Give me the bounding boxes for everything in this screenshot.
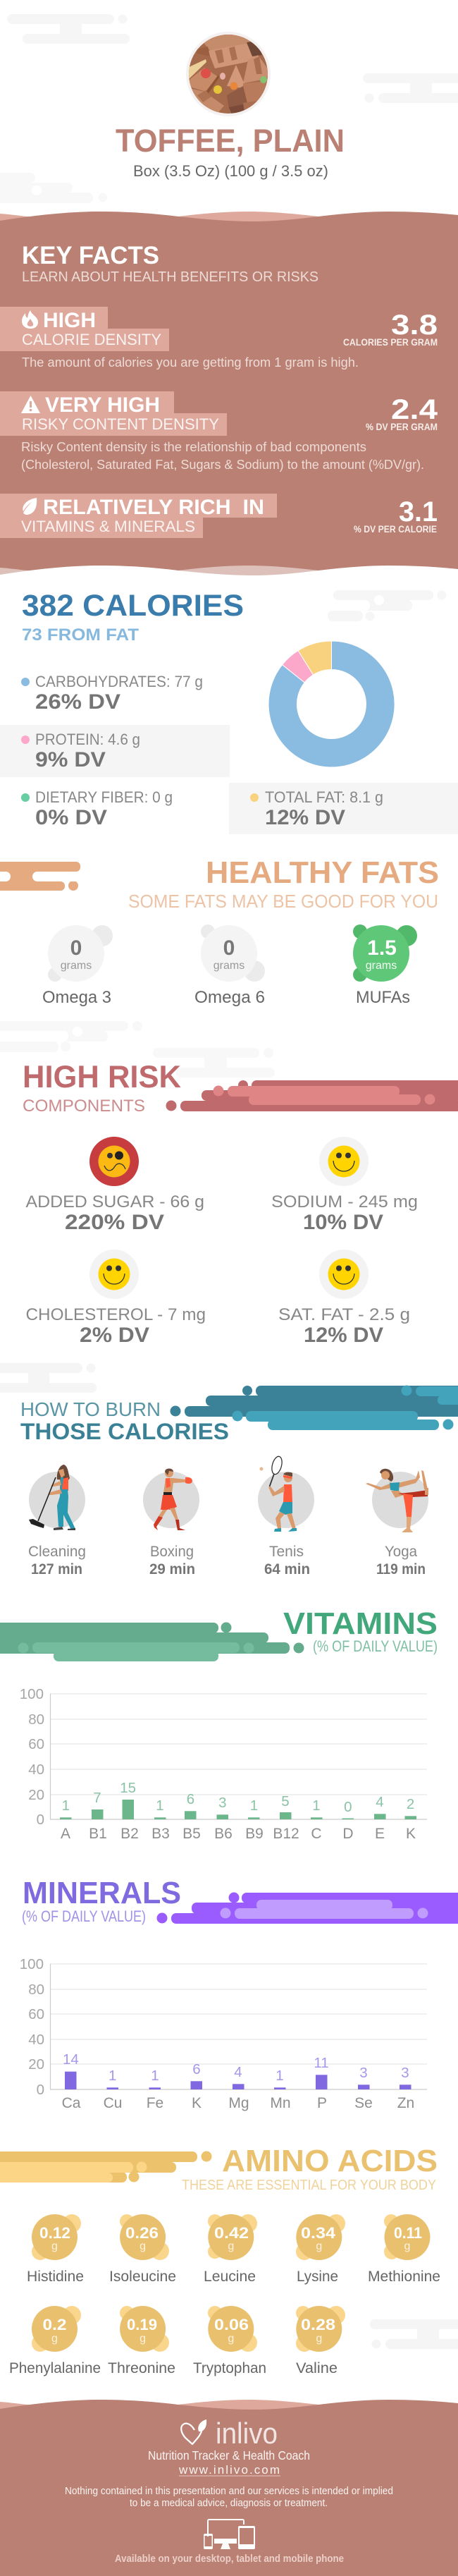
label calorie density: CALORIE DENSITY bbox=[22, 331, 161, 348]
panel: key facts bbox=[0, 212, 458, 594]
component: sodium: 10% DV bbox=[303, 1211, 383, 1234]
icon: devices bbox=[204, 2519, 255, 2549]
x axis labels: A bbox=[61, 1826, 70, 1842]
key facts heading: KEY FACTS bbox=[22, 242, 159, 269]
value labels: 14 bbox=[63, 2051, 79, 2068]
top wave bbox=[0, 212, 458, 585]
x axis labels: B1 bbox=[89, 1826, 107, 1842]
legend: protein: PROTEIN: 4.6 g bbox=[35, 731, 140, 748]
label vitamins and minerals: VITAMINS & MINERALS bbox=[21, 518, 195, 535]
activity: yoga bbox=[366, 1469, 428, 1577]
fat: omega 3: grams bbox=[61, 960, 92, 972]
y axis labels bbox=[20, 1686, 44, 1828]
decorative cloud bbox=[328, 590, 447, 621]
amino: tryptophan bbox=[193, 2306, 266, 2376]
fact: risky content density bbox=[0, 391, 438, 472]
value labels: 1 bbox=[156, 1797, 164, 1814]
y axis labels: 20 bbox=[28, 2056, 44, 2073]
website link: www.inlivo.com bbox=[178, 2463, 280, 2477]
y axis labels: 80 bbox=[28, 1711, 44, 1728]
amino: threonine: 0.19 bbox=[127, 2316, 157, 2333]
panel: vitamins bbox=[0, 1606, 438, 1842]
y axis labels: 80 bbox=[28, 1982, 44, 1998]
x axis labels: B12 bbox=[273, 1826, 299, 1842]
component: saturated fat bbox=[278, 1250, 410, 1347]
activity: yoga: Yoga bbox=[385, 1544, 417, 1560]
fat: omega 6: grams bbox=[213, 960, 245, 972]
amino: threonine: Threonine bbox=[108, 2360, 175, 2376]
amino: lysine: 0.34 bbox=[301, 2224, 336, 2242]
x axis labels: Ca bbox=[62, 2095, 81, 2111]
figure: tennis player bbox=[259, 1455, 297, 1532]
decorative clouds middle bbox=[0, 1021, 275, 1078]
y axis labels: 40 bbox=[28, 1762, 44, 1778]
panel: minerals bbox=[20, 1876, 458, 2111]
amino: methionine bbox=[368, 2214, 440, 2285]
component: sodium bbox=[271, 1137, 418, 1234]
value labels: 2 bbox=[407, 1796, 414, 1812]
activity: cleaning bbox=[28, 1465, 86, 1577]
calories heading: 382 CALORIES bbox=[22, 589, 244, 623]
component: added sugar: 220% DV bbox=[65, 1211, 164, 1234]
fat: mufas: MUFAs bbox=[356, 988, 410, 1007]
x axis labels: Fe bbox=[147, 2095, 163, 2111]
disclaimer: Nothing contained in this presentation and our services is intended or implied bbox=[65, 2486, 393, 2497]
icon: heart with leaf bbox=[181, 2419, 206, 2444]
decorative cloud top left bbox=[7, 14, 130, 44]
legend: carbohydrates bbox=[21, 673, 203, 714]
figure: boxer bbox=[154, 1468, 192, 1530]
amino: leucine: Leucine bbox=[204, 2269, 256, 2285]
value labels: 1 bbox=[62, 1797, 70, 1814]
component: cholesterol: CHOLESTEROL - 7 mg bbox=[25, 1305, 206, 1324]
disclaimer bbox=[65, 2486, 393, 2509]
figure: person sweeping bbox=[29, 1465, 75, 1530]
legend: carbohydrates: CARBOHYDRATES: 77 g bbox=[35, 673, 203, 690]
amino: isoleucine: Isoleucine bbox=[109, 2269, 176, 2285]
disclaimer: to be a medical advice, diagnosis or treatment. bbox=[130, 2498, 328, 2509]
legend: total fat bbox=[229, 783, 458, 834]
description: The amount of calories you are getting from 1 gram is high. bbox=[22, 355, 359, 370]
fat: omega 3: Omega 3 bbox=[42, 988, 111, 1007]
value labels: 7 bbox=[93, 1790, 101, 1806]
x axis labels: Cu bbox=[104, 2095, 122, 2111]
component: saturated fat: 12% DV bbox=[304, 1324, 383, 1347]
decorative band bbox=[171, 1385, 458, 1430]
decorative cloud top right bbox=[363, 73, 458, 103]
amino: lysine bbox=[296, 2214, 345, 2285]
icon: smiley bbox=[319, 1250, 369, 1299]
value labels: 3 bbox=[401, 2065, 409, 2081]
x axis labels: E bbox=[375, 1826, 385, 1842]
amino: histidine: Histidine bbox=[27, 2269, 84, 2285]
heading: AMINO ACIDS bbox=[222, 2144, 438, 2178]
fat: mufas: 1.5 bbox=[367, 936, 397, 960]
value labels: 15 bbox=[120, 1780, 136, 1796]
activity: cleaning: 127 min bbox=[31, 1561, 82, 1577]
y axis labels: 0 bbox=[37, 1812, 44, 1828]
label very high: VERY HIGH bbox=[45, 393, 160, 417]
fat: omega 3: 0 bbox=[70, 936, 82, 960]
x axis labels: P bbox=[317, 2095, 327, 2111]
tagline: Nutrition Tracker & Health Coach bbox=[148, 2448, 310, 2462]
x axis labels: Mn bbox=[270, 2095, 291, 2111]
x axis labels: Se bbox=[354, 2095, 373, 2111]
panel: how to burn those calories bbox=[20, 1385, 458, 1577]
fat: mufas: grams bbox=[366, 960, 397, 972]
amino: phenylalanine: g bbox=[51, 2333, 58, 2345]
y axis labels: 60 bbox=[28, 2006, 44, 2022]
panel: high risk components bbox=[23, 1060, 458, 1347]
legend: dietary fiber: DIETARY FIBER: 0 g bbox=[35, 788, 173, 806]
y axis labels: 60 bbox=[28, 1736, 44, 1752]
value labels: 1 bbox=[276, 2068, 284, 2084]
fat: mufas bbox=[353, 924, 417, 1007]
activity: boxing bbox=[143, 1468, 199, 1577]
icon: flame bbox=[22, 310, 38, 329]
donut chart bbox=[268, 641, 395, 767]
component: cholesterol bbox=[25, 1250, 206, 1347]
x axis labels: C bbox=[311, 1826, 322, 1842]
amino: valine bbox=[296, 2306, 345, 2376]
legend: protein bbox=[0, 725, 230, 777]
decorative band bbox=[0, 2151, 211, 2183]
component: sodium: SODIUM - 245 mg bbox=[271, 1192, 418, 1211]
subheading: (% OF DAILY VALUE) bbox=[22, 1907, 146, 1925]
activity: boxing: 29 min bbox=[149, 1561, 195, 1577]
x axis labels: B2 bbox=[120, 1826, 139, 1842]
icon: warning bbox=[21, 396, 40, 413]
heading line 2: THOSE CALORIES bbox=[20, 1419, 229, 1444]
x axis labels bbox=[62, 2095, 414, 2111]
component: added sugar: ADDED SUGAR - 66 g bbox=[25, 1192, 204, 1211]
food photo: toffee chocolates bbox=[186, 32, 271, 116]
unit: CALORIES PER GRAM bbox=[343, 337, 438, 348]
amino: histidine bbox=[27, 2214, 84, 2285]
panel: footer bbox=[0, 2400, 458, 2576]
legend: dietary fiber: 0% DV bbox=[35, 806, 107, 829]
unit: % DV PER CALORIE bbox=[354, 524, 437, 535]
y axis labels: 40 bbox=[28, 2032, 44, 2048]
amino: histidine: g bbox=[51, 2240, 58, 2252]
x axis labels: B9 bbox=[245, 1826, 264, 1842]
amino: threonine bbox=[108, 2306, 175, 2376]
amino: tryptophan: 0.06 bbox=[214, 2316, 249, 2333]
decorative band bbox=[0, 862, 89, 891]
amino: isoleucine: 0.26 bbox=[125, 2224, 159, 2242]
activity: tennis: 64 min bbox=[264, 1561, 310, 1577]
x axis labels: B3 bbox=[151, 1826, 170, 1842]
legend: total fat: 12% DV bbox=[265, 806, 345, 829]
bars bbox=[60, 1800, 416, 1819]
panel: healthy fats bbox=[0, 855, 439, 1007]
fat: omega 6: 0 bbox=[223, 936, 235, 960]
figure: yoga pose bbox=[366, 1469, 428, 1532]
description: (Cholesterol, Saturated Fat, Sugars & Sodium) to the amount (%DV/gr). bbox=[21, 458, 424, 472]
decorative band bbox=[156, 1893, 458, 1924]
value: 3.8 bbox=[391, 310, 438, 341]
heading line 1: HOW TO BURN bbox=[20, 1398, 161, 1420]
availability note: Available on your desktop, tablet and mobile phone bbox=[115, 2553, 344, 2565]
amino: methionine: Methionine bbox=[368, 2269, 440, 2285]
x axis labels: K bbox=[192, 2095, 202, 2111]
panel: calories bbox=[0, 589, 458, 834]
icon: smiley bbox=[319, 1137, 369, 1186]
label high: HIGH bbox=[43, 309, 96, 332]
value: 3.1 bbox=[399, 496, 438, 527]
amino: methionine: g bbox=[404, 2240, 410, 2252]
legend: carbohydrates: 26% DV bbox=[35, 690, 120, 714]
amino: isoleucine: g bbox=[140, 2240, 146, 2252]
legend: total fat: TOTAL FAT: 8.1 g bbox=[265, 788, 383, 806]
amino: leucine: 0.42 bbox=[214, 2224, 249, 2242]
from fat subheading: 73 FROM FAT bbox=[22, 625, 139, 645]
logo: inlivo: inlivo bbox=[216, 2417, 278, 2450]
title: TOFFEE, PLAIN bbox=[116, 123, 345, 159]
value labels: 3 bbox=[218, 1795, 227, 1811]
x axis labels: D bbox=[342, 1826, 354, 1842]
y axis labels: 20 bbox=[28, 1787, 44, 1803]
value labels: 1 bbox=[312, 1797, 321, 1814]
heading: HEALTHY FATS bbox=[206, 855, 439, 890]
fact: calorie density bbox=[0, 307, 438, 370]
subheading: SOME FATS MAY BE GOOD FOR YOU bbox=[128, 892, 438, 912]
activity: yoga: 119 min bbox=[376, 1561, 426, 1577]
panel: amino acids bbox=[0, 2144, 458, 2376]
heading: HIGH RISK bbox=[23, 1060, 181, 1094]
value labels bbox=[63, 2051, 409, 2084]
bar chart: minerals bbox=[20, 1956, 427, 2111]
amino: leucine bbox=[204, 2214, 257, 2285]
value labels: 4 bbox=[234, 2064, 242, 2080]
icon: smiley bbox=[89, 1250, 139, 1299]
value labels: 11 bbox=[314, 2055, 329, 2071]
x axis labels: Zn bbox=[397, 2095, 414, 2111]
amino: histidine: 0.12 bbox=[39, 2224, 70, 2242]
amino: leucine: g bbox=[228, 2240, 234, 2252]
y axis labels bbox=[20, 1956, 44, 2098]
subheading: COMPONENTS bbox=[23, 1097, 145, 1116]
grid and axis bbox=[50, 1964, 427, 2089]
amino: lysine: Lysine bbox=[297, 2269, 338, 2285]
heading: VITAMINS bbox=[283, 1606, 438, 1641]
serving size: Box (3.5 Oz) (100 g / 3.5 oz) bbox=[133, 162, 328, 180]
amino: valine: g bbox=[316, 2333, 322, 2345]
amino: phenylalanine: 0.2 bbox=[42, 2316, 66, 2333]
activity: tennis: Tenis bbox=[269, 1544, 304, 1560]
x axis labels: K bbox=[406, 1826, 416, 1842]
decorative cloud left bbox=[0, 173, 107, 203]
fact: vitamins and minerals bbox=[0, 494, 438, 538]
decorative cloud bbox=[0, 1363, 97, 1393]
label risky content density: RISKY CONTENT DENSITY bbox=[22, 415, 219, 433]
amino: valine: 0.28 bbox=[301, 2316, 335, 2333]
value labels: 6 bbox=[192, 2061, 201, 2077]
panel: header bbox=[7, 14, 458, 179]
heading: MINERALS bbox=[23, 1876, 181, 1910]
amino: phenylalanine: Phenylalanine bbox=[9, 2360, 101, 2376]
amino: tryptophan: g bbox=[228, 2333, 234, 2345]
activity: boxing: Boxing bbox=[150, 1544, 194, 1560]
value labels: 0 bbox=[344, 1799, 352, 1815]
amino: lysine: g bbox=[316, 2240, 322, 2252]
component: saturated fat: SAT. FAT - 2.5 g bbox=[278, 1305, 410, 1324]
amino: threonine: g bbox=[140, 2333, 146, 2345]
x axis labels: B6 bbox=[214, 1826, 233, 1842]
grid and axis bbox=[50, 1694, 427, 1819]
decorative band bbox=[166, 1080, 458, 1111]
description bbox=[21, 440, 424, 472]
bar chart: vitamins bbox=[20, 1686, 427, 1842]
y axis labels: 0 bbox=[37, 2082, 44, 2098]
bars bbox=[65, 2072, 411, 2089]
footer wave and background bbox=[0, 2400, 458, 2576]
amino: valine: Valine bbox=[296, 2360, 338, 2376]
value labels: 1 bbox=[250, 1797, 258, 1814]
x axis labels: B5 bbox=[182, 1826, 201, 1842]
label relatively rich: RELATIVELY RICH IN bbox=[43, 496, 264, 519]
y axis labels: 100 bbox=[20, 1686, 44, 1702]
decorative cloud bbox=[370, 2319, 458, 2349]
y axis labels: 100 bbox=[20, 1956, 44, 1972]
amino: phenylalanine bbox=[9, 2306, 101, 2376]
activity: tennis bbox=[258, 1455, 314, 1577]
unit: % DV PER GRAM bbox=[366, 422, 438, 432]
bottom wave bbox=[0, 566, 458, 594]
value labels: 1 bbox=[109, 2068, 116, 2084]
logo: inlivo bbox=[181, 2417, 278, 2450]
description: Risky Content density is the relationship of bad components bbox=[21, 440, 366, 454]
x axis labels bbox=[61, 1826, 416, 1842]
value labels: 4 bbox=[376, 1794, 384, 1810]
value: 2.4 bbox=[391, 394, 438, 425]
fat: omega 3 bbox=[42, 925, 113, 1007]
decorative band bbox=[0, 1622, 304, 1661]
legend: protein: 9% DV bbox=[35, 748, 106, 771]
value labels: 6 bbox=[187, 1791, 194, 1807]
legend: dietary fiber bbox=[21, 788, 173, 829]
icon: worried face bbox=[89, 1137, 139, 1186]
value labels: 3 bbox=[359, 2065, 368, 2081]
amino: tryptophan: Tryptophan bbox=[193, 2360, 266, 2376]
icon: leaf bbox=[23, 498, 37, 515]
component: cholesterol: 2% DV bbox=[80, 1324, 149, 1347]
amino: isoleucine bbox=[109, 2214, 176, 2285]
value labels bbox=[62, 1780, 414, 1815]
value labels: 1 bbox=[151, 2068, 159, 2084]
x axis labels: Mg bbox=[228, 2095, 249, 2111]
value labels: 5 bbox=[281, 1793, 290, 1809]
component: added sugar bbox=[25, 1137, 204, 1234]
activity: cleaning: Cleaning bbox=[28, 1544, 86, 1560]
amino: methionine: 0.11 bbox=[394, 2224, 422, 2242]
fat: omega 6: Omega 6 bbox=[194, 988, 265, 1007]
key facts subheading: LEARN ABOUT HEALTH BENEFITS OR RISKS bbox=[22, 269, 318, 285]
fat: omega 6 bbox=[194, 924, 265, 1007]
